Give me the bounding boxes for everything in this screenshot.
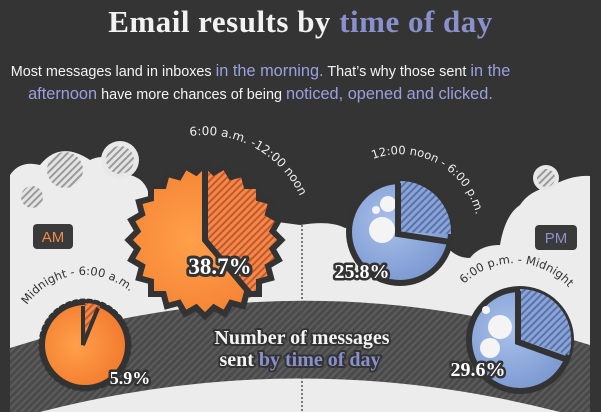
AM label	[33, 224, 73, 249]
band heading: Number of messages	[214, 327, 390, 349]
label: afternoon: 12:00 noon - 6:00 p.m.	[372, 146, 481, 214]
label: night: Midnight - 6:00 a.m.	[21, 266, 130, 304]
band heading: sent by time of day	[219, 349, 381, 371]
subtitle: Most messages land in inboxes in the morning. That’s why those sent in the	[11, 61, 510, 80]
label: morning: 6:00 a.m. -12:00 noon	[190, 126, 305, 196]
center dotted line	[301, 225, 303, 412]
decorative hatched circles	[21, 141, 559, 208]
label: evening: 6:00 p.m. - Midnight	[460, 256, 573, 288]
subtitle	[11, 61, 510, 103]
subtitle: afternoon have more chances of being noticed, opened and clicked.	[28, 84, 493, 103]
pie 5.9%: 5.9%	[110, 368, 150, 388]
starburst 38.7%: 38.7%	[188, 254, 252, 279]
pie 29.6%	[450, 289, 571, 391]
pie 25.8%	[334, 181, 451, 283]
AM label: AM	[42, 229, 64, 246]
dark band	[10, 301, 590, 412]
pie 5.9%	[41, 301, 150, 389]
PM label	[535, 225, 577, 250]
band heading	[214, 327, 390, 371]
pie 25.8%: 25.8%	[334, 261, 390, 283]
starburst 38.7%	[124, 168, 286, 320]
PM label: PM	[545, 230, 567, 247]
title: Email results by time of day	[108, 4, 493, 39]
light background clouds	[10, 151, 590, 412]
chart area	[10, 126, 590, 412]
pie 29.6%: 29.6%	[450, 359, 506, 381]
